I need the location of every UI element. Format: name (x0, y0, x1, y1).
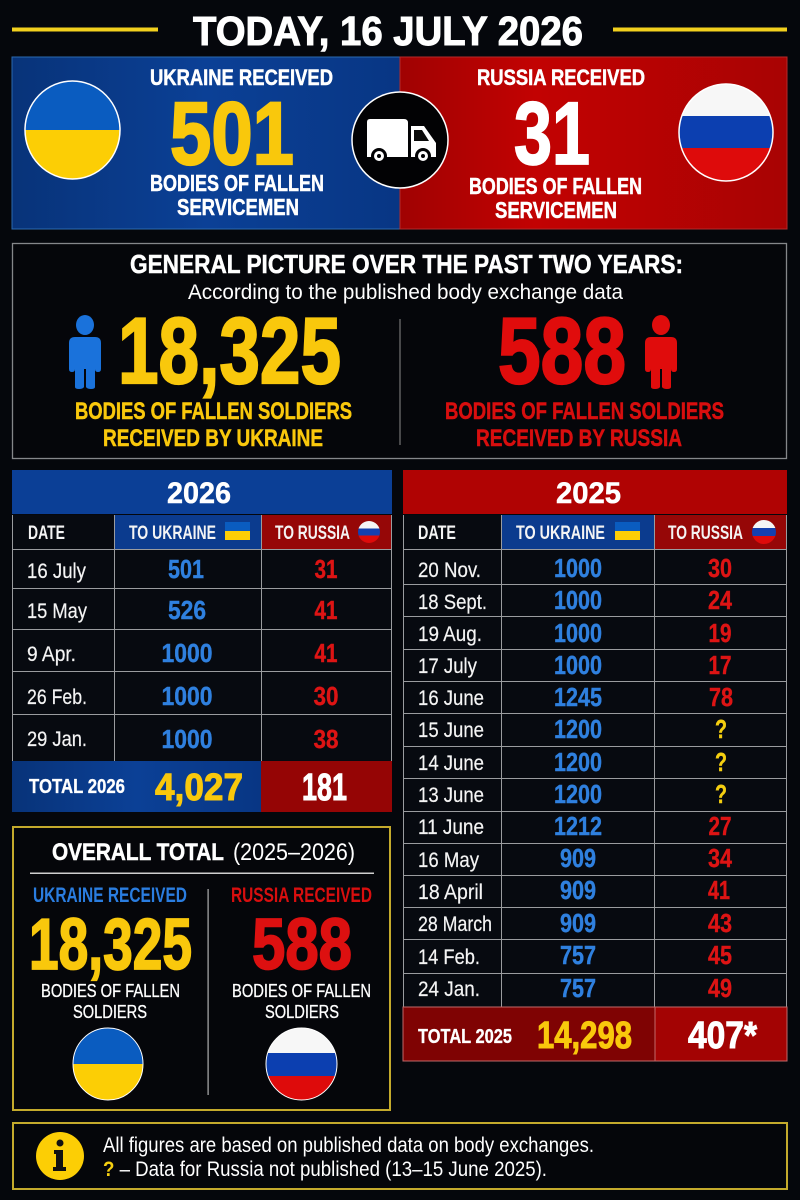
grid lines (403, 515, 787, 1061)
text: Russia received: RUSSIA RECEIVED (231, 884, 372, 907)
total row 2025: TOTAL 2025 (418, 1026, 512, 1048)
text: bodies, Ukraine (150, 170, 324, 220)
column headers: TO RUSSIA (668, 523, 743, 544)
subheading: According to the published body exchange data (188, 281, 623, 304)
footnote text: All figures are based on published data on body exchanges. (103, 1134, 594, 1157)
rows: 28 March (418, 912, 492, 936)
rows: 27 (708, 813, 732, 841)
text: received by Ukraine (75, 398, 352, 452)
rows: 16 June (418, 686, 484, 710)
rows: 909 (560, 845, 596, 873)
text: received by Russia: RECEIVED BY RUSSIA (476, 425, 682, 452)
rows: 41 (708, 877, 730, 905)
table heading: 2025: 2025 (556, 477, 621, 510)
rows: 34 (708, 845, 733, 873)
total row 2025: 407* (688, 1015, 757, 1057)
rows: 31 (314, 556, 338, 584)
table heading: 2025 (403, 470, 787, 514)
panel: general picture (12, 244, 786, 458)
total row 2026: 4,027 (155, 767, 243, 809)
rows: 30 (708, 555, 732, 583)
text: Russia received: RUSSIA RECEIVED (477, 65, 645, 90)
number: 588: 588 (498, 298, 626, 403)
rows: 14 June (418, 751, 484, 775)
rows: 909 (560, 877, 596, 905)
table: 2026 (12, 470, 392, 812)
icon: Russia flag (265, 1028, 338, 1100)
rows: ? (715, 716, 727, 744)
number: 588: 588 (252, 905, 352, 985)
table: 2025 (403, 470, 787, 1061)
text: bodies, Russia: BODIES OF FALLEN (469, 173, 642, 199)
rows: 1000 (162, 726, 212, 754)
rows: 1000 (162, 683, 212, 711)
rows: 757 (560, 975, 596, 1003)
rows: 17 July (418, 654, 477, 678)
rows: 15 June (418, 718, 484, 742)
rows: 41 (314, 597, 338, 625)
rows: 19 Aug. (418, 622, 482, 646)
footnote text: ? – Data for Russia not published (13–15 June 2025). (103, 1158, 547, 1181)
rows: 1000 (554, 555, 602, 583)
rows: 18 Sept. (418, 590, 487, 614)
title: TODAY, 16 JULY 2026 (193, 8, 583, 54)
panel: footnote (13, 1123, 787, 1189)
rows: 1000 (554, 587, 602, 615)
rows: 13 June (418, 783, 484, 807)
icon: Ukraine flag (72, 1028, 144, 1100)
rows: 45 (708, 942, 732, 970)
table heading: 2026: 2026 (167, 477, 231, 510)
rows: 757 (560, 942, 596, 970)
icon: red person (645, 315, 677, 389)
table heading: 2026 (12, 470, 392, 514)
text: Ukraine received: UKRAINE RECEIVED (150, 65, 333, 90)
number: 18,325: 18,325 (118, 298, 341, 403)
text: bodies, Ukraine: SOLDIERS (73, 1002, 147, 1022)
text: bodies, Russia: SERVICEMEN (495, 197, 617, 223)
rows: 1200 (554, 749, 602, 777)
column headers: TO RUSSIA (275, 523, 350, 544)
rows: 43 (708, 910, 732, 938)
column headers (418, 515, 787, 549)
heading: overall total: OVERALL TOTAL (52, 839, 224, 866)
text: bodies, Russia (232, 981, 371, 1022)
text: bodies, Ukraine: BODIES OF FALLEN (41, 981, 180, 1001)
flag outline: Ukraine (25, 81, 120, 179)
text: received by Ukraine: BODIES OF FALLEN SOLDIERS (75, 398, 352, 425)
text: bodies, Russia: BODIES OF FALLEN (232, 981, 371, 1001)
rows: 16 May (418, 848, 479, 872)
total row 2025 (403, 1007, 787, 1061)
rows: 9 Apr. (27, 642, 76, 666)
rows: 24 (708, 587, 733, 615)
total row 2026: 181 (302, 767, 347, 809)
panel: today's exchange (12, 57, 787, 229)
text: bodies, Russia (469, 173, 642, 223)
rows: 16 July (27, 559, 86, 583)
rows: 14 Feb. (418, 945, 480, 969)
rows: 1200 (554, 716, 602, 744)
rows: 1000 (554, 620, 602, 648)
icon: truck (352, 92, 448, 188)
rows: 501 (168, 556, 204, 584)
rows: 18 April (418, 880, 483, 904)
rows: 1000 (162, 640, 212, 668)
rows: 17 (708, 652, 732, 680)
rows: 20 Nov. (418, 558, 481, 582)
number: 31: 31 (514, 83, 590, 183)
number: 18,325: 18,325 (29, 905, 192, 985)
rows: 49 (708, 975, 732, 1003)
text: bodies, Ukraine (41, 981, 180, 1022)
text: bodies, Ukraine: SERVICEMEN (177, 194, 299, 220)
rows (27, 556, 338, 754)
text: received by Russia (445, 398, 724, 452)
text: bodies, Russia: SOLDIERS (265, 1002, 339, 1022)
panel: overall total (13, 827, 390, 1110)
rows: 26 Feb. (27, 685, 87, 709)
icon: Russia flag (678, 83, 776, 182)
column headers: TO UKRAINE (129, 523, 216, 544)
rows: 19 (708, 620, 732, 648)
icon: info (36, 1132, 84, 1180)
rows: 41 (314, 640, 338, 668)
rows: 24 Jan. (418, 977, 480, 1001)
flag outline: Russia (679, 84, 773, 181)
heading: general picture: GENERAL PICTURE OVER THE PAST TWO YEARS: (130, 249, 683, 279)
text: Ukraine received: UKRAINE RECEIVED (33, 884, 187, 907)
rows: 1212 (554, 813, 602, 841)
column headers: TO UKRAINE (516, 523, 605, 544)
rows: 78 (709, 684, 733, 712)
total row 2026 (12, 761, 392, 812)
icon: Ukraine flag (24, 80, 122, 180)
rows: 909 (560, 910, 596, 938)
number: 501: 501 (170, 83, 294, 183)
total row 2026: TOTAL 2026 (29, 776, 125, 798)
rows: ? (715, 749, 727, 777)
rows: 11 June (418, 815, 484, 839)
text: received by Ukraine: RECEIVED BY UKRAINE (103, 425, 323, 452)
rows: 38 (314, 726, 338, 754)
column headers: DATE (28, 523, 65, 544)
heading: overall total (52, 839, 355, 866)
rows: 526 (168, 597, 206, 625)
heading: overall total: (2025–2026) (233, 839, 355, 866)
rows: 1245 (554, 684, 602, 712)
total row 2025: 14,298 (537, 1015, 632, 1057)
rows: 30 (314, 683, 338, 711)
text: bodies, Ukraine: BODIES OF FALLEN (150, 170, 324, 196)
rows: ? (715, 781, 727, 809)
text: received by Russia: BODIES OF FALLEN SOLDIERS (445, 398, 724, 425)
rows: 15 May (27, 599, 87, 623)
column headers: DATE (418, 523, 456, 544)
grid lines (12, 515, 392, 812)
rows: 29 Jan. (27, 727, 87, 751)
rows: 1200 (554, 781, 602, 809)
icon: blue person (69, 315, 101, 389)
rows: 1000 (554, 652, 602, 680)
rows (418, 555, 733, 1003)
footnote text (103, 1134, 594, 1181)
column headers (28, 515, 392, 549)
title (12, 8, 787, 54)
